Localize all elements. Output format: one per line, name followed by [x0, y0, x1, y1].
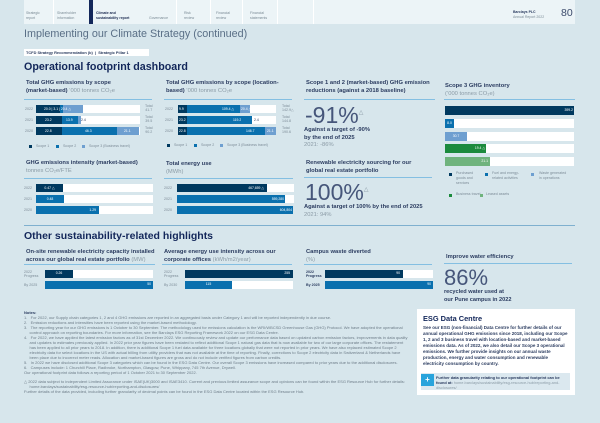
legend [449, 171, 566, 185]
row target [164, 281, 294, 289]
row 2020: 2020 [164, 208, 172, 212]
panel heading: ESG Data Centre [423, 314, 482, 323]
row 2022 [165, 104, 294, 113]
panel heading: tonnes CO₂e/FTE [26, 168, 72, 174]
panel: GHG market-based [24, 80, 153, 148]
row 2022: 9.9 [179, 107, 184, 111]
tab dividers [52, 0, 55, 24]
row 2022: 0.47 △ [44, 186, 55, 190]
tab: risk review [184, 11, 194, 20]
tab: financial review [216, 11, 230, 20]
row 2021: 23.2 [179, 118, 186, 122]
bar: fuel and energy [445, 119, 574, 128]
row 2022 [164, 184, 294, 192]
panel heading: across our global real estate portfolio (MW) [26, 257, 146, 263]
row 2020 [25, 126, 153, 135]
panel heading: Total energy use [166, 161, 212, 167]
row 2020: 21.1 [124, 129, 131, 133]
rule [444, 98, 575, 101]
row 2021: 2021 [25, 118, 33, 122]
tab: shareholder information: information [57, 16, 74, 20]
row progress: 0.26 [56, 271, 62, 275]
row 2020: 604,804 [280, 208, 292, 212]
rule [164, 177, 293, 180]
row target [304, 281, 434, 289]
legend: Scope 2 [201, 143, 214, 147]
panel: renewable sourcing [304, 160, 432, 218]
row 2021: 144.8 [282, 119, 291, 123]
panel heading [26, 249, 155, 264]
row 2022: 467,659 △ [248, 186, 264, 190]
tab: risk review: review [184, 16, 194, 20]
target text [304, 127, 370, 148]
panel: water efficiency [444, 254, 576, 308]
row 2020: 2020 [25, 129, 33, 133]
row progress: 90 [396, 271, 400, 275]
stat: 100%△ [305, 179, 368, 205]
legend: in operations [539, 176, 560, 180]
row 2022: Total [282, 104, 290, 108]
panel: campus waste [304, 249, 436, 289]
row 2021: 2021 [165, 118, 173, 122]
row 2021: 13.9 [66, 118, 73, 122]
legend row 2 [449, 192, 509, 197]
note lines: 6. Campuses include: 1 Churchill Place, Radbroke, Northampton, Glasgow, Pune, Whippany, 745 7th Avenue, Drywell. [24, 364, 236, 370]
legend row 2: Business travel [456, 192, 480, 196]
row 2021: 2021 [24, 197, 32, 201]
tab: climate and sustainability report: sustainability report [96, 16, 129, 20]
row progress: 2022 [306, 270, 314, 274]
tab: risk review: Risk [184, 11, 191, 15]
tab: governance: Governance [149, 16, 168, 20]
assurance note: Further details of the data provided, including further granularity of decimal points can be found in the ESG Data Centre located within the ESG Resource Hub. [24, 389, 304, 394]
panel: scope 3 inventory [444, 83, 575, 197]
heading: other highlights: Other sustainability-related highlights [24, 230, 213, 242]
tab: shareholder information [57, 11, 76, 20]
panel heading: global real estate portfolio [306, 168, 378, 174]
row 2020 [24, 206, 153, 214]
legend: Waste generated [539, 171, 566, 175]
row 2021 [165, 115, 291, 124]
rule [164, 98, 292, 101]
TCFD tag [24, 49, 149, 56]
tab: financial review: review [216, 16, 226, 20]
tab: climate and sustainability report [96, 11, 130, 20]
legend: services [456, 181, 469, 185]
note lines: 2. Emission reductions and intensities have been reported using the market-based methodology. [24, 320, 197, 324]
row 2020: 22.8 [179, 129, 186, 133]
report name: Barclays PLC [513, 10, 536, 14]
note lines: electricity data for select locations in the US with actual billing from utility providers that was not available at the time of reporting. Finally, corrections to Scope 2 electricity data in Switzerland & Netherlands have [30, 350, 400, 354]
rule [304, 263, 432, 266]
target text: Against a target of -90% [304, 127, 370, 133]
row 2021: 39.5 [145, 119, 152, 123]
row 2021: 2021 [164, 197, 172, 201]
legend: Purchased [456, 171, 473, 175]
panel heading [306, 80, 430, 94]
row 2022 [24, 184, 153, 192]
panel: energy intensity [164, 249, 296, 289]
target text [304, 204, 423, 219]
row 2020: 90.2 [145, 130, 152, 134]
note lines: 1. For 2022, our Supply chain categories 1, 2 and 4 GHG emissions are reported in an aggregated basis under Category 1 and will be reported independently in due course. [24, 314, 331, 320]
row 2022: 142.9△ [282, 108, 294, 112]
row progress: Progress [164, 274, 178, 278]
rule [304, 176, 432, 179]
panel heading [26, 80, 115, 94]
rule [162, 263, 292, 266]
panel: intensity [24, 160, 153, 214]
note lines: been place due to incorrect meter reads. Allocation and market-based figures are gross and do not include verified figures from carbon credits. [30, 354, 281, 360]
row 2021: 119.2 [233, 118, 241, 122]
panel: ESG Data Centre [417, 309, 575, 395]
row 2022: 2022 [165, 107, 173, 111]
assurance note: home.barclays/sustainability/esg-resource-hub/reporting-and-disclosures/ [30, 384, 159, 389]
panel: scope 3 inventory: 399.2 [564, 108, 573, 112]
body text: emissions data. As of 2022, we also detail our Scope 3 operational [423, 343, 565, 348]
panel heading: Average energy use intensity across our [164, 249, 276, 255]
page number: 80 [561, 7, 573, 19]
row 2021: 2.4 [81, 118, 86, 122]
stat: -91%△ [305, 102, 363, 128]
tab: shareholder information: Shareholder [57, 11, 76, 15]
icon: plus: + [425, 375, 430, 384]
notes heading: Notes: [24, 310, 36, 314]
panel heading: based) ’000 tonnes CO₂e [166, 88, 232, 94]
rule [444, 262, 572, 265]
body text: annual operational GHG emissions since 2018, including our Scope [423, 331, 568, 336]
panel: scope 3 inventory: 21.1 [481, 159, 488, 163]
panel heading [306, 249, 371, 264]
assurance note: △ 2022 data subject to independent Limited Assurance under ISAE(UK)3000 and ISAE3410. Current and previous limited assurance scope and opinions can be found within the ESG Resource Hub for further details: [24, 378, 405, 384]
row 2022: 2022 [25, 107, 33, 111]
row 2021 [24, 195, 153, 203]
tab: financial review: Financial [216, 11, 230, 15]
row progress: Progress [24, 274, 38, 278]
panel heading: Total GHG emissions by scope (location- [166, 80, 279, 86]
panel: scope 3 inventory: 30.7 [453, 134, 459, 138]
bar: leased assets [445, 157, 574, 166]
note lines: control approach on reporting boundaries. For more information, see the Barclays ESG Reporting Framework 2022 on our ESG Data Centre. [30, 330, 279, 334]
row 2022: 2022 [164, 186, 172, 190]
legend: Scope 3 (Business travel) [89, 144, 130, 148]
target text: 2021: 94% [304, 212, 332, 218]
tab: strategic report [26, 11, 40, 20]
panel heading: reductions (against a 2018 baseline) [306, 88, 406, 94]
panel heading: (’000 tonnes CO₂e) [445, 91, 495, 97]
panel heading: (%) [306, 257, 315, 263]
page title: Implementing our Climate Strategy (continued) [24, 28, 247, 40]
panel heading [166, 161, 212, 175]
panel heading [306, 160, 412, 174]
body text: 1, 2 and 3 business travel with location-based and market-based [423, 337, 561, 342]
callout text: disclosures/ [436, 384, 457, 390]
row target: 50 [147, 282, 151, 286]
row target: By 2025 [306, 283, 320, 287]
assurance note [24, 378, 405, 394]
row progress: Progress [306, 274, 322, 278]
row progress [24, 270, 154, 278]
row progress: 2022 [24, 270, 32, 274]
stat caption: recycled water used at [444, 289, 504, 295]
icon: plus [421, 374, 434, 386]
body text: emissions. We further provide insights on our annual waste [423, 349, 551, 354]
body text: electricity consumption by country. [423, 361, 499, 366]
row progress: 2022 [164, 270, 172, 274]
TCFD tag: TCFD Strategy Recommendation (b) | Strategic Pillar 1 [26, 50, 129, 55]
target text: 2021: -86% [304, 142, 334, 148]
panel: GHG location-based [164, 80, 294, 147]
callout text: Further data granularity relating to our operational footprint can be [436, 374, 560, 380]
panel heading: Scope 3 GHG inventory [445, 83, 510, 89]
stat: 86% [444, 265, 488, 290]
row target [24, 281, 154, 289]
body text: See our ESG (non-financial) Data Centre for further details of our [423, 325, 562, 330]
tab: strategic report: report [26, 16, 35, 20]
panel: on-site renewable [24, 249, 156, 289]
note lines: has been applied to all prior years to 2018. In addition, there is additional Scope 1 fuel data available for three locations globally that were not reported in prior years. We have also replaced estimated Scope 2 [30, 344, 397, 350]
panel heading [445, 83, 510, 97]
legend: Scope 1 [174, 143, 187, 147]
callout text [436, 374, 560, 390]
panel: reductions [304, 80, 435, 148]
row progress [304, 270, 434, 278]
row 2020: 46.3 [85, 129, 92, 133]
row 2020: 21.1 [267, 129, 274, 133]
rule [24, 98, 152, 101]
panel heading [164, 249, 276, 264]
row 2020: 22.8 [45, 129, 52, 133]
panel heading: corporate offices (kWh/m2/year) [164, 257, 251, 263]
row 2022: 2022 [24, 186, 32, 190]
note lines: 4. For 2022, we have applied the latest emission factors as of 31st December 2022. We continuously review and update our performance data based on updated carbon emission factors, improvements in data quality [24, 334, 407, 340]
link callout [421, 373, 570, 390]
panel heading: Scope 1 and 2 (market-based) GHG emission [306, 80, 430, 86]
row target: By 2025 [24, 283, 37, 287]
panel: scope 3 inventory: 19.4 △ [475, 146, 485, 150]
rule [24, 177, 152, 180]
rule [304, 98, 435, 101]
panel heading: (MWh) [166, 169, 183, 175]
stat caption: our Pune campus in 2022 [444, 296, 511, 302]
legend row 2: Leased assets [486, 192, 509, 196]
row 2021 [164, 195, 294, 203]
target text: Against a target of 100% by the end of 2025 [304, 204, 423, 210]
panel heading [26, 160, 138, 174]
row target: 115 [206, 282, 211, 286]
row 2020: 2020 [24, 208, 32, 212]
legend: Scope 3 (Business travel) [227, 143, 268, 147]
legend: Scope 2 [63, 144, 76, 148]
row 2020: 1.29 [89, 208, 96, 212]
row 2020 [165, 126, 291, 135]
row 2021: 2.4 [254, 118, 259, 122]
header navigation bar [24, 0, 575, 24]
row 2020: 146.7 [246, 129, 254, 133]
row 2022: 109.4 △ [222, 107, 234, 111]
legend: related activities [492, 176, 518, 180]
stat caption [444, 289, 511, 304]
section divider [24, 225, 575, 226]
body text: production, energy and water consumption and renewable [423, 355, 548, 360]
note lines: Our operational footprint data follows a reporting period of 1 October 2021 to 30 September 2022. [24, 370, 197, 374]
row 2022: 20.0 | 3.1 | 20.4 △ [44, 107, 71, 111]
note lines: 3. The reporting year for our GHG emissions is 1 October to 30 September. The methodology used for emissions calculation is the WRI/WBCSD Greenhouse Gas (GHG) Protocol. We have adopted the operational [24, 324, 403, 330]
row 2020: Total [145, 126, 153, 130]
legend: Scope 1 [36, 144, 49, 148]
panel: energy use [164, 161, 294, 214]
callout text: found at: home.barclays/sustainability/esg-resource-hub/reporting-and- [436, 380, 559, 384]
row 2022: 41.7 [145, 108, 152, 112]
row 2022: Total [145, 104, 153, 108]
panel heading: GHG emissions intensity (market-based) [26, 160, 138, 166]
tab: financial statements: Financial [250, 11, 264, 15]
bar: business travel [445, 144, 574, 152]
row 2021: Total [145, 115, 153, 119]
active tab marker [89, 0, 93, 24]
note lines: and updates to estimates previously applied. In 2022 prior year figures have been restated to reflect additional Scope 1 natural gas data that is now available for two of our large corporate offices. The restatement [30, 340, 403, 344]
panel heading: Total GHG emissions by scope [26, 80, 111, 86]
tab: financial statements: statements [250, 16, 267, 20]
row 2021: 559,280 [272, 197, 284, 201]
rule [24, 263, 155, 266]
row 2021: Total [282, 115, 290, 119]
tab: climate and sustainability report: Climate and [96, 11, 116, 15]
heading: operational footprint dashboard: Operational footprint dashboard [24, 61, 188, 73]
note lines: 5. In 2022 we have disclosed additional Scope 3 categories which can be found in the ESG Data Centre. Our overall Scope 3 emissions have increased compared to prior years due to the additional disclosures. [24, 360, 398, 364]
row target: 90 [427, 282, 431, 286]
row target: By 2030 [164, 283, 177, 287]
panel heading: On-site renewable electricity capacity installed [26, 249, 155, 255]
bar: purchased goods [445, 106, 574, 114]
row progress [164, 270, 294, 278]
tab: strategic report: Strategic [26, 11, 40, 15]
panel heading: (market-based) ’000 tonnes CO₂e [26, 88, 115, 94]
panel heading [166, 80, 279, 94]
bar: waste [445, 132, 574, 140]
body text [423, 325, 568, 367]
row 2020: Total [282, 126, 290, 130]
row 2021: 0.48 [47, 197, 53, 201]
row 2020 [164, 206, 293, 214]
target text: by the end of 2025 [304, 134, 355, 140]
row 2021 [25, 115, 153, 124]
notes [24, 310, 412, 394]
row 2022: 20.4 △ [241, 107, 251, 111]
tab: financial statements [250, 11, 267, 20]
panel: scope 3 inventory: 8.0 [447, 121, 452, 125]
legend [167, 143, 268, 147]
panel heading: Renewable electricity sourcing for our [306, 160, 411, 166]
row 2020: 2020 [165, 129, 173, 133]
legend: goods and [456, 176, 473, 180]
row progress: 255 [284, 271, 290, 275]
row 2021: 23.2 [45, 118, 52, 122]
panel heading: Improve water efficiency [446, 254, 514, 260]
legend: Fuel and energy- [492, 171, 519, 175]
report name: Annual Report 2022 [513, 15, 544, 19]
row 2022 [25, 104, 153, 113]
panel heading: Campus waste diverted [306, 249, 371, 255]
legend [29, 144, 130, 148]
row 2020: 190.6 [282, 130, 291, 134]
note lines [24, 314, 412, 384]
report name [513, 10, 544, 19]
